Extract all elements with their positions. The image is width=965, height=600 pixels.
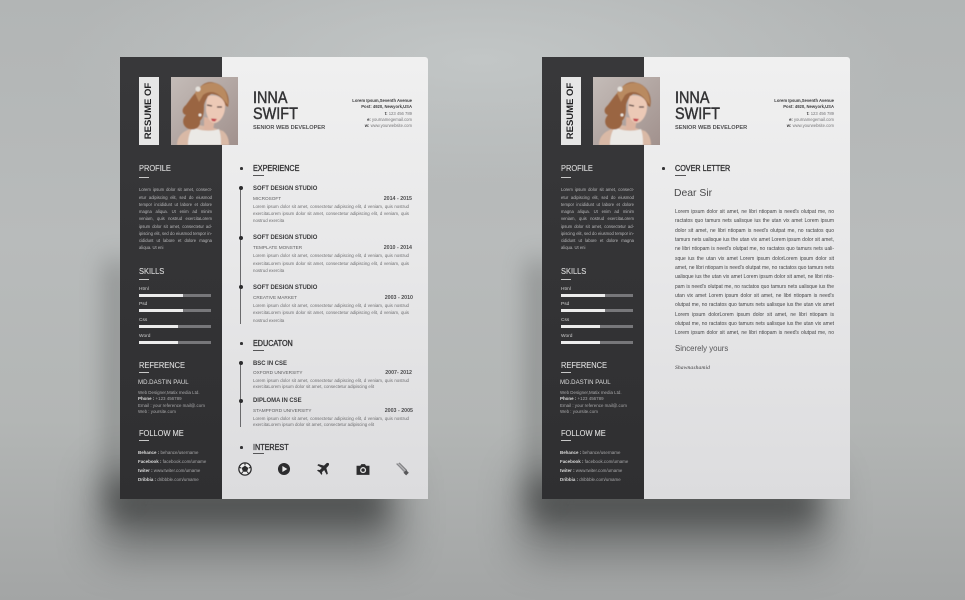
section: experience: TEMPLATE MONSTER: [253, 245, 302, 250]
section: education: [239, 338, 413, 427]
contact details: [774, 98, 834, 128]
social links: twiter : www.twiter.com/umame: [560, 468, 622, 473]
reference details: Email : your reference mail@.com: [560, 402, 627, 408]
social links: [560, 450, 628, 482]
panel: dark sidebar: [120, 57, 222, 499]
letter body: olutpat me, no ractatos quo tamurs nets ualisque ius the utan vix amet: [675, 302, 834, 308]
profile text: veniam, quis nostrud exercitaLorem: [561, 216, 634, 221]
section: experience: Lorem ipsum dolor sit amet, consectetur adipiscing elit, d veniam, quis nostrud: [253, 253, 409, 258]
reference details: Email : your reference mail@.com: [138, 402, 205, 408]
resume of tag: [139, 77, 159, 145]
section: experience: EXPERIENCE: [253, 163, 299, 173]
contact details: e: yournamegemail.com: [789, 116, 834, 122]
letter body: [675, 209, 834, 336]
social links: Behance : behance/username: [560, 450, 620, 455]
profile text: veniam, quis nostrud exercitaLorem: [139, 216, 212, 221]
section: experience: [239, 163, 413, 324]
resume of tag: RESUME OF: [565, 83, 576, 139]
section: experience: nostrud exercita: [253, 268, 284, 272]
profile text: Lorem ipsum dolor sit amet, consect-: [139, 187, 212, 192]
letter body: ualisque ius the utan vix amet Lorem ipsum dolor sit amet, ne libri ntio-: [675, 274, 834, 280]
portrait photo: [593, 77, 660, 145]
profile text: magna aliqua. Ut enim ad minim: [139, 209, 212, 214]
section: experience: nostrud exercita: [253, 318, 284, 322]
name: SWIFT: [253, 104, 298, 123]
portrait photo: [171, 77, 238, 145]
section: experience: 2010 - 2014: [384, 245, 412, 251]
skill: psd: Psd: [561, 302, 569, 307]
reference details: Web Designer,Matix media Ltd.: [138, 390, 200, 394]
shadow: right page: [500, 253, 848, 577]
section: education: STAMPFORD UNIVERSITY: [253, 408, 312, 413]
letter body: Lorem ipsum dolor sit amet, ne libri ntiopam is need's olutpat me, no: [675, 330, 834, 336]
heading: reference: REFERENCE: [561, 360, 607, 370]
reference details: MD.DASTIN PAUL: [560, 379, 611, 386]
reference details: Web : yoursite.com: [138, 409, 176, 414]
heading: reference: REFERENCE: [139, 360, 185, 370]
profile text: [139, 187, 212, 250]
letter body: Lorem ipsum dolor sit amet, ne libri ntiopam is need's olutpat me, no: [675, 209, 834, 215]
heading: skills: SKILLS: [561, 266, 586, 276]
contact details: [352, 98, 412, 128]
skill: html: Html: [561, 287, 571, 292]
letter body: amet, ne libri ntiopam is need's olutpat me, no ractatos quo tamurs nets: [675, 265, 834, 271]
name: INNA: [675, 88, 710, 107]
name: SENIOR WEB DEVELOPER: [253, 125, 325, 131]
heading: follow me: FOLLOW ME: [139, 428, 184, 438]
social links: Facebook : facebook.com/umame: [560, 459, 628, 464]
section: experience: Lorem ipsum dolor sit amet, consectetur adipiscing elit, d veniam, quis nostrud: [253, 303, 409, 308]
letter body: pam is need's olutpat me, no ractatos quo tamurs nets ualisque ius the: [675, 284, 834, 290]
profile text: tempor incididunt ut labore et dolore: [561, 202, 634, 207]
section: education: OXFORD UNIVERSITY: [253, 370, 302, 375]
skill: word: Word: [139, 334, 150, 339]
panel: resume page: [120, 57, 428, 499]
social links: Dribbia : dribbble.com/umame: [138, 477, 199, 482]
letter body: ne libri ntiopam is need's olutpat me, no ractatos quo tamurs nets uali-: [675, 246, 834, 252]
icon: airplane: [317, 462, 329, 475]
name: SENIOR WEB DEVELOPER: [675, 125, 747, 131]
name: [253, 88, 325, 131]
heading: follow me: FOLLOW ME: [561, 428, 606, 438]
section: education: BSC IN CSE: [253, 360, 287, 366]
profile text: [561, 187, 634, 250]
resume of tag: RESUME OF: [143, 83, 154, 139]
section: experience: SOFT DESIGN STUDIO: [253, 186, 317, 192]
reference details: Phone : +123 456789: [560, 396, 604, 401]
icon: play button: [278, 463, 290, 475]
contact details: Post: 4920, Newyork,USA: [361, 104, 412, 109]
section: experience: exercitaLorem ipsum dolor sit amet, consectetur adipiscing elit, d veniam, quis: [253, 260, 409, 266]
profile text: etur adipiscing elit, sed do eiusmod: [561, 194, 634, 200]
social links: Facebook : facebook.com/umame: [138, 459, 206, 464]
name: SWIFT: [675, 104, 720, 123]
section: education: exercitaLorem ipsum dolor sit amet, consectetur adipiscing elit: [253, 384, 374, 389]
contact details: Post: 4920, Newyork,USA: [783, 104, 834, 109]
letter body: utan vix amet Lorem ipsum dolor sit amet, ne libri ntiopam is need's: [675, 293, 834, 299]
letter body: dolor sit amet, ne libri ntiopam is need's olutpat me, no ractatos quo: [675, 228, 834, 234]
contact details: t: 123 456 789: [807, 110, 834, 116]
letter body: ractatos quo tamurs nets ualisque ius the utan vix amet Lorem ipsum: [675, 218, 834, 224]
heading: profile: PROFILE: [139, 163, 171, 173]
sign-off: Sincerely yours: [675, 344, 728, 353]
salutation: Dear Sir: [674, 188, 712, 199]
social links: Dribbia : dribbble.com/umame: [560, 477, 621, 482]
section: education: Lorem ipsum dolor sit amet, consectetur adipiscing elit, d veniam, quis nostrud: [253, 378, 409, 383]
social links: Behance : behance/username: [138, 450, 198, 455]
profile text: aliqua. Ut eni: [561, 245, 585, 250]
profile text: ipsum dolor sit amet, consectetur ad-: [561, 224, 634, 228]
section: experience: exercitaLorem ipsum dolor sit amet, consectetur adipiscing elit, d veniam, quis: [253, 211, 409, 216]
section: education: exercitaLorem ipsum dolor sit amet, consectetur adipiscing elit: [253, 422, 374, 426]
section: experience: 2003 - 2010: [385, 295, 413, 301]
letter body: olutpat me, no ractatos quo tamurs nets ualisque ius the utan vix amet: [675, 321, 834, 327]
contact details: w: www.yourwebsite.com: [365, 123, 412, 128]
name: [675, 88, 747, 131]
icon: football: [238, 462, 252, 476]
heading: profile: PROFILE: [561, 163, 593, 173]
heading: cover letter: COVER LETTER: [675, 163, 730, 173]
skill: css: Css: [561, 318, 569, 323]
reference details: [138, 379, 205, 414]
profile text: cididunt ut labore et dolore magna: [561, 238, 634, 243]
section: education: EDUCATON: [253, 338, 293, 348]
section: experience: nostrud exercita: [253, 218, 284, 223]
section: education: 2003 - 2005: [385, 408, 413, 414]
heading: skills: SKILLS: [139, 266, 164, 276]
skill: word: Word: [561, 334, 572, 339]
section heading: interest: INTEREST: [253, 442, 289, 452]
shadow: left page: [78, 253, 422, 577]
skill: psd: Psd: [139, 302, 147, 307]
section: experience: SOFT DESIGN STUDIO: [253, 284, 317, 290]
letter body: sque ius the utan vix amet Lorem ipsum dolorLorem ipsum dolor sit: [675, 256, 834, 262]
section: experience: MICROSOFT: [253, 196, 281, 201]
reference details: Phone : +123 456789: [138, 396, 182, 401]
profile text: ipsum dolor sit amet, consectetur ad-: [139, 224, 212, 228]
profile text: magna aliqua. Ut enim ad minim: [561, 209, 634, 214]
section: experience: Lorem ipsum dolor sit amet, consectetur adipiscing elit, d veniam, quis nostrud: [253, 204, 409, 209]
panel: dark sidebar: [542, 57, 644, 499]
skill: html: Html: [139, 287, 149, 292]
resume of tag: [561, 77, 581, 145]
profile text: Lorem ipsum dolor sit amet, consect-: [561, 187, 634, 192]
profile text: etur adipiscing elit, sed do eiusmod: [139, 194, 212, 200]
letter body: tamurs nets ualisque ius the utan vix amet Lorem ipsum dolor sit amet,: [675, 237, 834, 243]
profile text: ipiscing elit, sed do eiusmod tempor in-: [561, 231, 634, 236]
contact details: w: www.yourwebsite.com: [787, 123, 834, 128]
profile text: cididunt ut labore et dolore magna: [139, 238, 212, 243]
reference details: Web : yoursite.com: [560, 409, 598, 414]
icon: camera: [356, 464, 370, 475]
section: experience: CREATIVE MARKET: [253, 295, 297, 300]
section: education: DIPLOMA IN CSE: [253, 398, 302, 404]
skill: css: Css: [139, 318, 147, 323]
section: experience: exercitaLorem ipsum dolor sit amet, consectetur adipiscing elit, d veniam, quis: [253, 310, 409, 315]
contact details: t: 123 456 789: [385, 110, 412, 116]
reference details: Web Designer,Matix media Ltd.: [560, 390, 622, 394]
social links: twiter : www.twiter.com/umame: [138, 468, 200, 473]
profile text: tempor incididunt ut labore et dolore: [139, 202, 212, 207]
profile text: ipiscing elit, sed do eiusmod tempor in-: [139, 231, 212, 236]
panel: cover letter page: [542, 57, 850, 499]
name: INNA: [253, 88, 288, 107]
contact details: Lorem Ipsum,Seventh Avenue: [352, 98, 412, 102]
contact details: Lorem Ipsum,Seventh Avenue: [774, 98, 834, 102]
reference details: [560, 379, 627, 414]
section: experience: 2014 - 2015: [384, 196, 412, 202]
contact details: e: yournamegemail.com: [367, 116, 412, 122]
icon: pen tool: [396, 462, 409, 476]
social links: [138, 450, 206, 482]
profile text: aliqua. Ut eni: [139, 245, 163, 250]
section: education: Lorem ipsum dolor sit amet, consectetur adipiscing elit, d veniam, quis nostrud: [253, 416, 409, 421]
section: experience: SOFT DESIGN STUDIO: [253, 235, 317, 241]
section: education: 2007- 2012: [385, 370, 412, 376]
reference details: MD.DASTIN PAUL: [138, 379, 189, 386]
signature: Shawnashamid: [675, 365, 710, 371]
